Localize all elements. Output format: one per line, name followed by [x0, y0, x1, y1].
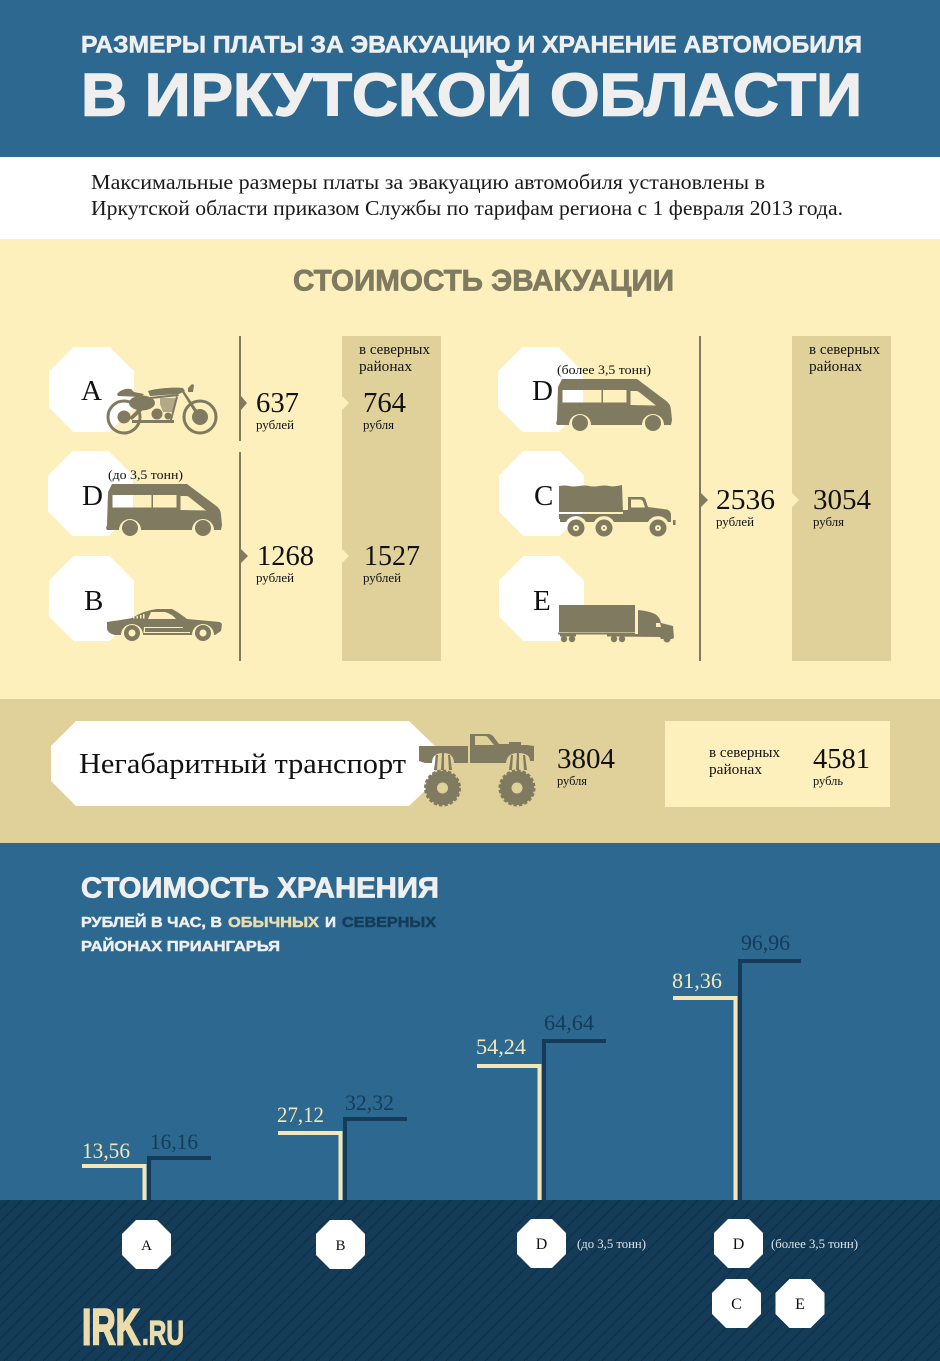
logo: IRK — [82, 1298, 140, 1356]
prices left: рублей — [256, 417, 294, 432]
panel: oversize transport — [0, 699, 940, 843]
prices right: в северных — [809, 342, 881, 358]
category letters: D — [532, 375, 553, 407]
bracket line D B — [239, 452, 248, 661]
weight notes: (более 3,5 тонн) — [557, 362, 651, 377]
northern column left — [342, 336, 441, 661]
panel: intro — [0, 157, 940, 239]
series B: 32,32 — [345, 1090, 394, 1115]
prices right: районах — [809, 359, 863, 375]
prices left — [256, 342, 431, 585]
heading: evacuation cost: СТОИМОСТЬ ЭВАКУАЦИИ — [293, 264, 674, 298]
category letters: A — [81, 375, 102, 407]
icon: van light — [106, 484, 222, 536]
legend badge D heavy — [714, 1219, 763, 1268]
badge B — [49, 556, 134, 641]
panel: oversize northern — [665, 721, 890, 807]
prices right: 3054 — [813, 485, 871, 516]
prices left: рублей — [363, 570, 401, 585]
icon: motorcycle — [108, 384, 216, 433]
price oversize: рубля — [557, 773, 587, 788]
subheading: РАЙОНАХ ПРИАНГАРЬЯ — [81, 937, 280, 955]
legend badge B — [316, 1220, 365, 1269]
badge E — [499, 556, 584, 641]
legend badge D light — [517, 1219, 566, 1268]
prices right: рубля — [813, 514, 844, 529]
title line 2: В ИРКУТСКОЙ ОБЛАСТИ — [81, 62, 862, 128]
series A: 13,56 — [82, 1138, 130, 1163]
panel: footer — [0, 1200, 940, 1361]
prices left: 1527 — [364, 541, 420, 572]
legend badge B: B — [335, 1238, 346, 1254]
logo: .RU — [142, 1314, 184, 1352]
legend note light: (до 3,5 тонн) — [577, 1237, 646, 1251]
panel: oversize northern: 4581 — [813, 744, 870, 775]
prices right — [716, 342, 881, 529]
category letters: B — [84, 585, 103, 617]
icon: sports car — [107, 609, 222, 641]
series D heavy C E: 81,36 — [672, 968, 722, 993]
prices left: рублей — [256, 570, 294, 585]
arrows in northern columns — [342, 396, 799, 563]
category letters: C — [534, 480, 553, 512]
series D light: 64,64 — [544, 1010, 594, 1035]
oversize label: Негабаритный транспорт — [79, 748, 406, 780]
legend badge C — [712, 1279, 761, 1328]
panel: storage cost — [0, 843, 940, 1200]
icon: monster truck — [419, 734, 534, 806]
title line 1: РАЗМЕРЫ ПЛАТЫ ЗА ЭВАКУАЦИЮ И ХРАНЕНИЕ АВТОМОБИЛЯ — [81, 32, 862, 58]
panel: oversize northern: рубль — [813, 773, 843, 788]
prices left: в северных — [359, 342, 431, 358]
series D heavy C E — [672, 930, 801, 1200]
prices left: районах — [359, 359, 413, 375]
category letters — [81, 375, 553, 617]
legend badge E: E — [795, 1296, 805, 1313]
icon: van heavy — [556, 379, 672, 431]
panel: oversize northern: районах — [709, 762, 763, 778]
prices left: рубля — [363, 417, 394, 432]
legend badge D light: D — [536, 1236, 547, 1253]
price oversize: 3804 — [557, 744, 615, 775]
series B: 27,12 — [277, 1102, 324, 1127]
bracket line right — [699, 336, 708, 661]
subheading: РУБЛЕЙ В ЧАС, В — [81, 913, 222, 931]
legend badge E — [776, 1279, 824, 1328]
prices left: 637 — [256, 388, 299, 419]
subheading: СЕВЕРНЫХ — [342, 914, 436, 931]
panel: oversize northern: в северных — [709, 745, 781, 761]
legend badge D heavy: D — [733, 1236, 744, 1253]
icon: covered truck — [559, 485, 676, 536]
prices right: 2536 — [716, 485, 775, 516]
series B — [277, 1090, 407, 1200]
subheading — [81, 913, 436, 955]
category letters: D — [82, 480, 103, 512]
bracket line A — [239, 336, 247, 441]
legend badge A — [122, 1220, 171, 1269]
northern column right — [792, 336, 891, 661]
badge D light — [48, 451, 133, 536]
series D light: 54,24 — [476, 1034, 526, 1059]
badge C — [499, 451, 584, 536]
weight notes — [108, 362, 651, 482]
series D light — [476, 1010, 606, 1200]
legend badge A: A — [141, 1238, 152, 1254]
heading: storage cost: СТОИМОСТЬ ХРАНЕНИЯ — [81, 872, 439, 904]
subheading: ОБЫЧНЫХ — [228, 914, 319, 931]
subheading: И — [325, 914, 336, 931]
series A — [82, 1129, 211, 1200]
intro text line 2: Иркутской области приказом Службы по тарифам региона с 1 февраля 2013 года. — [91, 196, 843, 220]
legend badge C: C — [731, 1296, 742, 1313]
legend note heavy: (более 3,5 тонн) — [771, 1237, 858, 1251]
prices left: 764 — [363, 388, 406, 419]
weight notes: (до 3,5 тонн) — [108, 467, 183, 482]
intro text line 1: Максимальные размеры платы за эвакуацию автомобиля установлены в — [91, 170, 765, 194]
oversize badge — [51, 721, 435, 806]
prices right: рублей — [716, 514, 754, 529]
chart: storage steps — [82, 930, 801, 1200]
series A: 16,16 — [150, 1129, 198, 1154]
badge D heavy — [498, 347, 583, 432]
series D heavy C E: 96,96 — [741, 930, 790, 955]
icon: semi truck — [558, 605, 674, 642]
price oversize — [557, 744, 615, 788]
badge A — [49, 347, 134, 432]
prices left: 1268 — [257, 541, 314, 572]
panel: evacuation cost — [0, 239, 940, 699]
panel: header — [0, 0, 940, 157]
category letters: E — [533, 585, 551, 617]
